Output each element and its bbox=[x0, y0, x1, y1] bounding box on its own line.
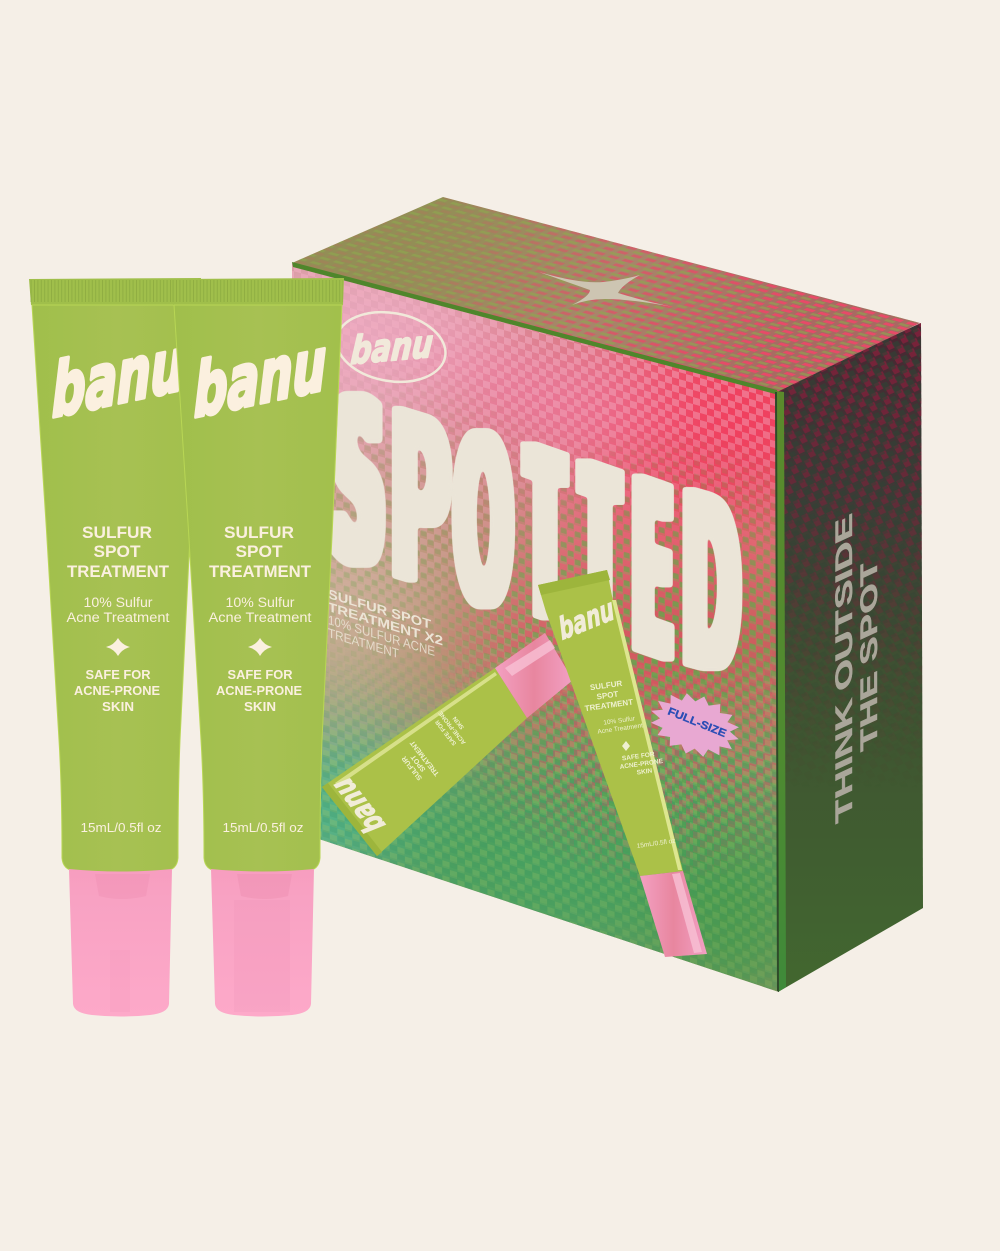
upright mini tube on box: SKIN bbox=[636, 767, 653, 777]
upright mini tube on box bbox=[538, 570, 707, 957]
upright mini tube on box: ACNE-PRONE bbox=[619, 758, 664, 771]
product box bbox=[190, 190, 930, 1040]
tube 1 logo: banu bbox=[52, 321, 184, 435]
tube 2 label bbox=[208, 524, 312, 835]
tube 1 label: SULFUR bbox=[82, 524, 152, 542]
box product description: TREATMENT bbox=[328, 625, 399, 661]
tube 1 label: 15mL/0.5fl oz bbox=[80, 820, 162, 835]
logo oval on box: banu bbox=[349, 322, 435, 374]
tube 2 label: ACNE-PRONE bbox=[216, 684, 302, 698]
lying mini tube on box: banu bbox=[324, 772, 393, 839]
box front face bbox=[292, 263, 779, 992]
tube 2 label: SPOT bbox=[236, 543, 282, 561]
box side slogan bbox=[831, 509, 883, 827]
tube 2 label: SULFUR bbox=[224, 524, 294, 542]
box product description bbox=[328, 586, 443, 661]
tube 1 label bbox=[66, 524, 170, 835]
box product description: SULFUR SPOT bbox=[328, 586, 431, 632]
tube 2 logo: banu bbox=[194, 321, 326, 435]
lying mini tube on box: SKIN bbox=[452, 715, 466, 730]
tube 1 crimp bbox=[29, 278, 201, 305]
SPOTTED title: O bbox=[454, 381, 513, 665]
lying mini tube on box: TREATMENT bbox=[409, 738, 441, 777]
logo oval on box bbox=[331, 304, 451, 390]
tube 2 crimp bbox=[171, 278, 344, 305]
box side slogan: THINK OUTSIDE bbox=[831, 509, 858, 827]
upright mini tube on box: TREATMENT bbox=[584, 698, 634, 713]
icon: four-point star on lid bbox=[539, 272, 673, 307]
tube 2 label: 10% Sulfur bbox=[226, 595, 295, 610]
tube 1 body bbox=[32, 305, 200, 873]
tube 2 cap bbox=[211, 869, 314, 1016]
upright mini tube on box: SAFE FOR bbox=[622, 751, 655, 763]
upright mini tube on box: 15mL/0.5fl oz bbox=[636, 838, 676, 850]
tube 1 label: ACNE-PRONE bbox=[74, 684, 160, 698]
box edges bbox=[292, 262, 786, 992]
tube 2 label: Acne Treatment bbox=[208, 610, 312, 625]
box right side face bbox=[778, 323, 923, 992]
tube 1 bbox=[29, 278, 201, 1016]
SPOTTED title: S bbox=[332, 349, 383, 621]
SPOTTED title: E bbox=[632, 427, 673, 719]
upright mini tube on box: SULFUR bbox=[589, 679, 623, 692]
tube 2 label: TREATMENT bbox=[209, 563, 311, 581]
SPOTTED title: T bbox=[528, 395, 562, 679]
tube 1 label: SPOT bbox=[94, 543, 140, 561]
SPOTTED title: P bbox=[389, 360, 451, 649]
tube 1 label: 10% Sulfur bbox=[84, 595, 153, 610]
upright mini tube on box: banu bbox=[555, 592, 618, 648]
SPOTTED title: D bbox=[682, 439, 740, 735]
full-size starburst badge bbox=[642, 682, 748, 768]
box product description: TREATMENT X2 bbox=[328, 599, 443, 648]
lying mini tube on box bbox=[322, 633, 573, 856]
SPOTTED title bbox=[332, 349, 740, 735]
lying mini tube on box: ACNE-PRONE bbox=[438, 710, 468, 745]
SPOTTED title: T bbox=[583, 412, 617, 696]
tube 2 label: SKIN bbox=[244, 700, 276, 714]
tube 1 label: SKIN bbox=[102, 700, 134, 714]
tube 1 label: SAFE FOR bbox=[86, 668, 150, 682]
box product description: 10% SULFUR ACNE bbox=[328, 612, 435, 659]
upright mini tube on box: SPOT bbox=[596, 689, 619, 701]
box side slogan: THE SPOT bbox=[856, 553, 883, 755]
tube 2 label: 15mL/0.5fl oz bbox=[222, 820, 304, 835]
tube 1 label: TREATMENT bbox=[67, 563, 169, 581]
tube 1 cap bbox=[69, 869, 172, 1016]
lying mini tube on box: SAFE FOR bbox=[434, 718, 458, 746]
upright mini tube on box: Acne Treatment bbox=[597, 722, 644, 736]
upright mini tube on box: 10% Sulfur bbox=[603, 715, 636, 727]
tube 2 bbox=[171, 278, 344, 1016]
lying mini tube on box: SULFUR bbox=[401, 755, 424, 781]
lying mini tube on box: SPOT bbox=[410, 753, 427, 773]
tube 1 label: Acne Treatment bbox=[66, 610, 170, 625]
tube 2 body bbox=[174, 305, 342, 873]
full-size starburst badge: FULL-SIZE bbox=[666, 706, 728, 740]
tube 2 label: SAFE FOR bbox=[228, 668, 292, 682]
box top face bbox=[292, 197, 920, 392]
